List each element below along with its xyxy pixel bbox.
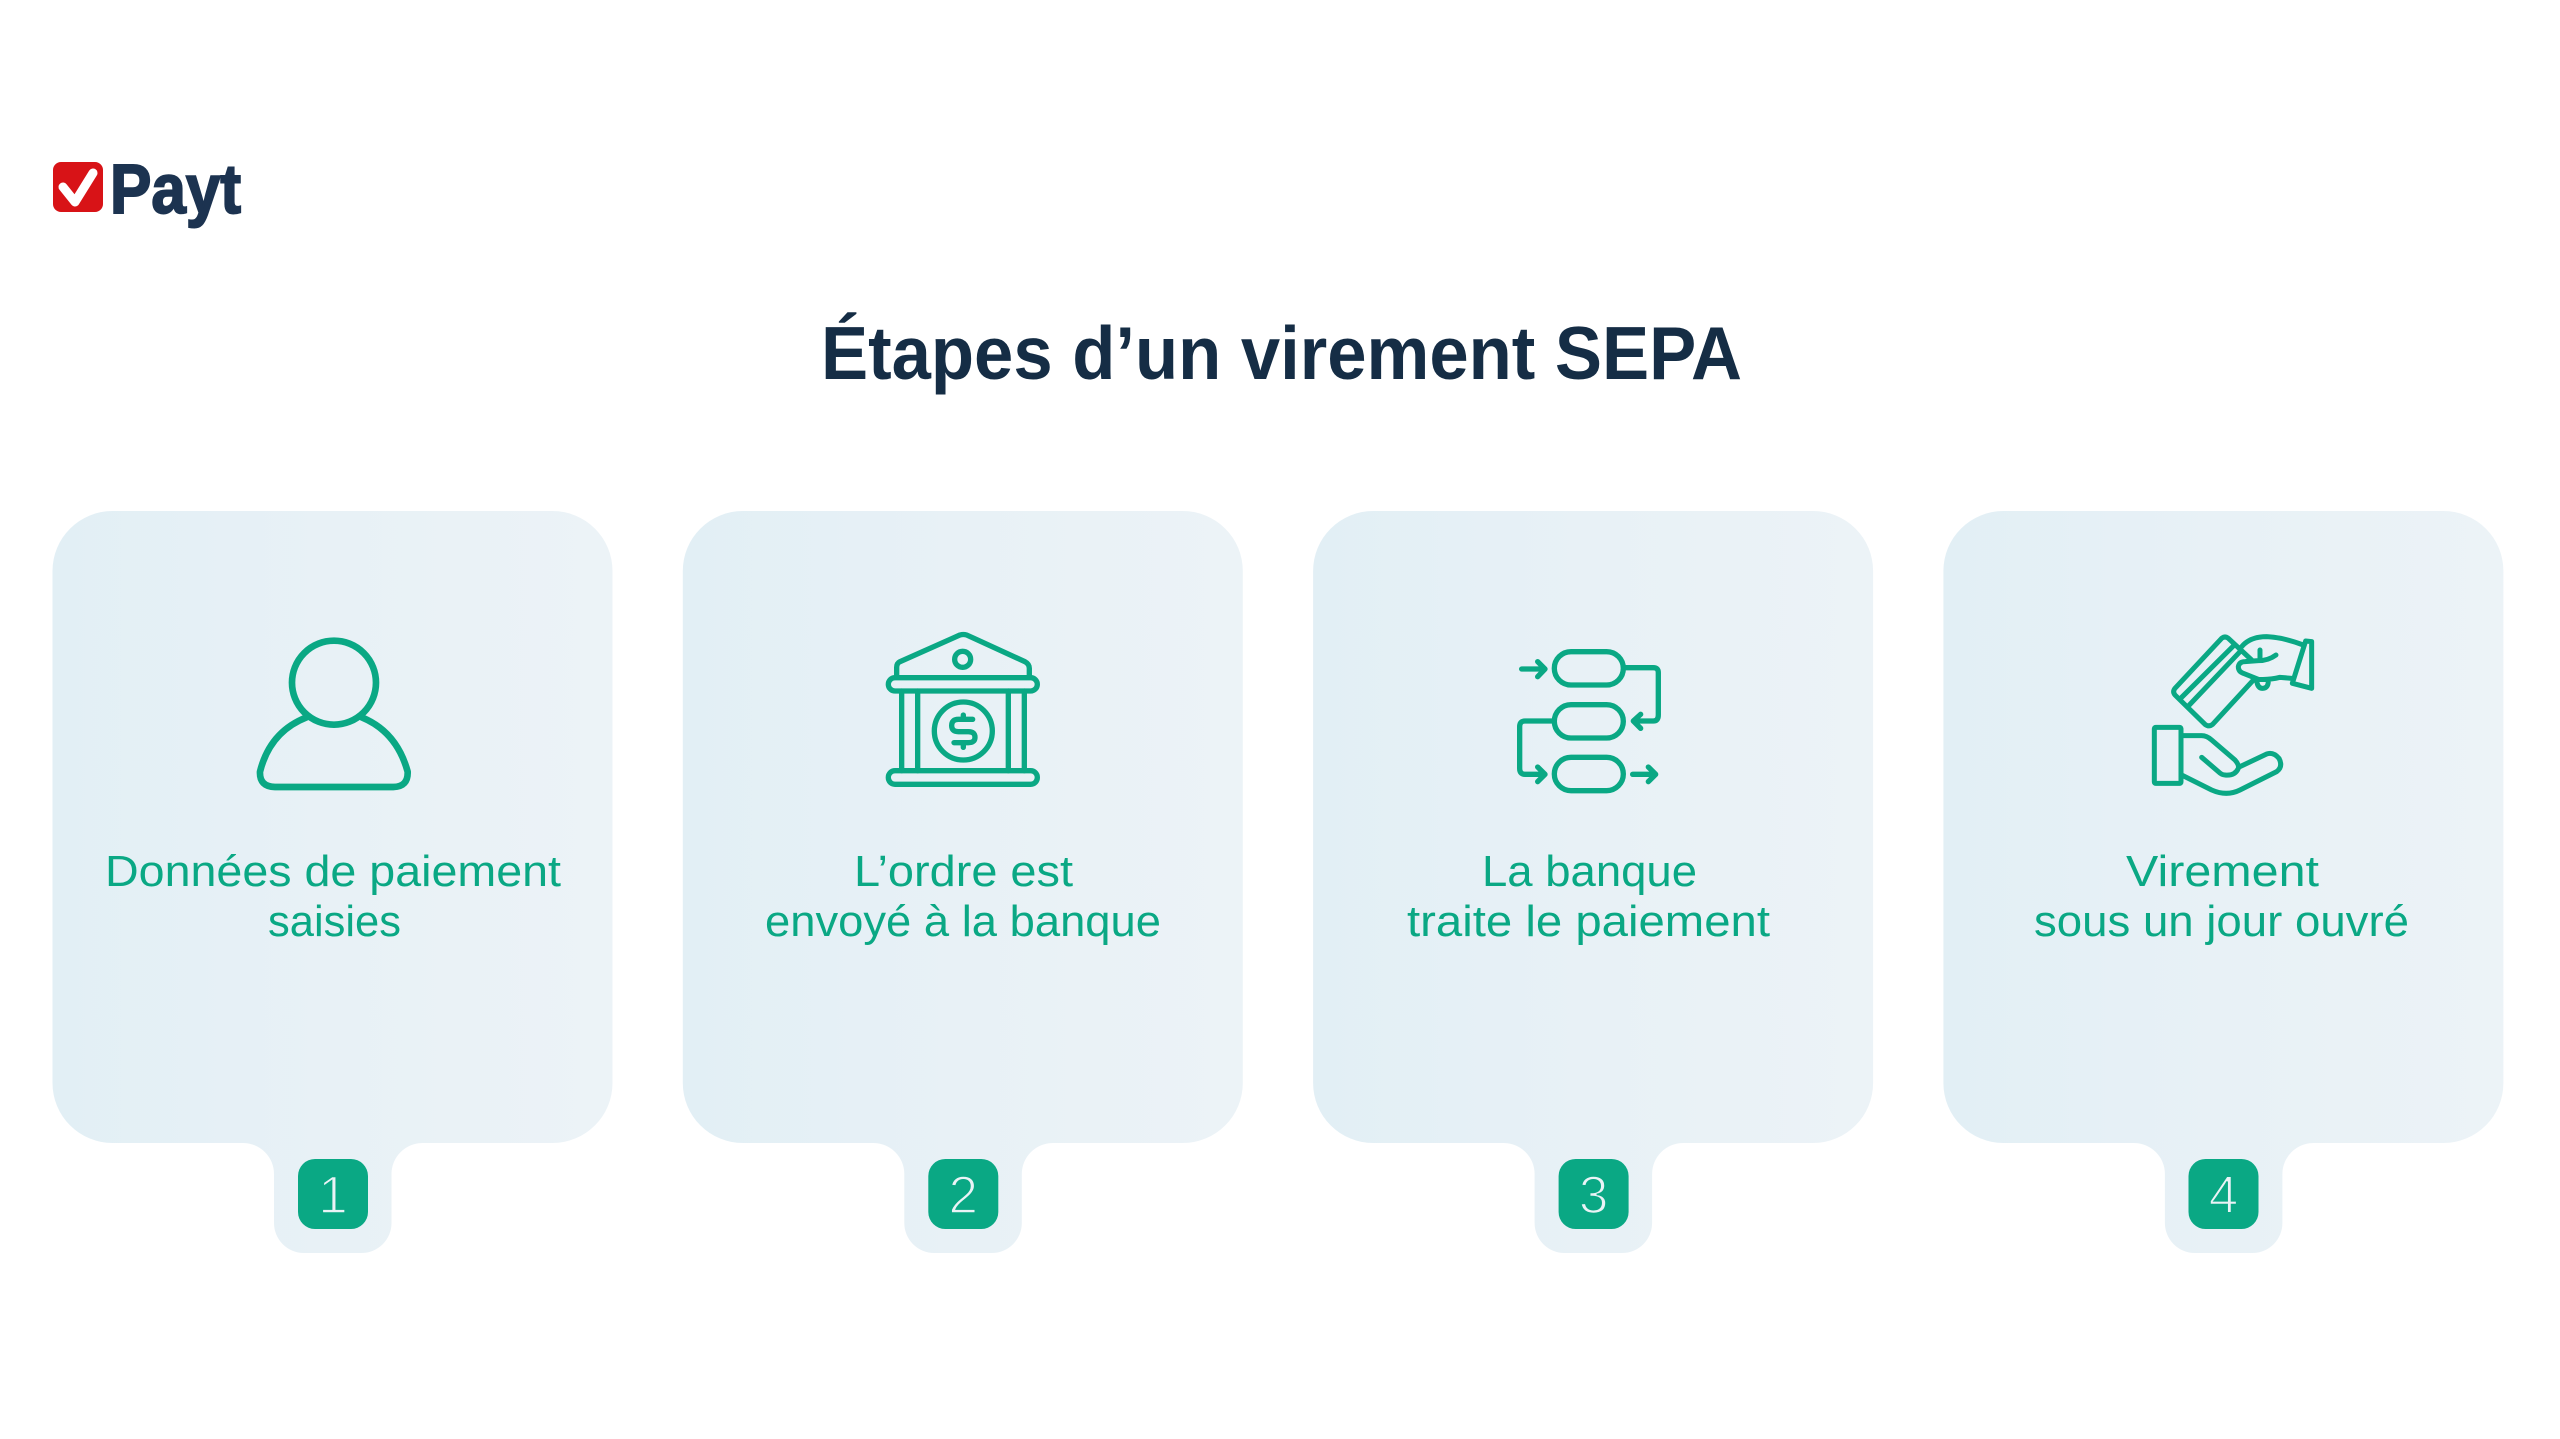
step text: sous un jour ouvré: [2034, 897, 2409, 946]
icon: bank: [888, 634, 1037, 784]
number badge 1: [298, 1159, 368, 1229]
number badge 3: 3: [1579, 1166, 1608, 1225]
icon: hands with card: [2154, 637, 2312, 793]
icon: person: [260, 641, 408, 787]
title: Étapes d’un virement SEPA: [821, 311, 1742, 395]
panel: step 2: [683, 511, 1243, 1253]
step text: L’ordre est: [854, 847, 1073, 896]
number badge 3: [1559, 1159, 1629, 1229]
panel: step 3: [1313, 511, 1873, 1253]
number badge 2: 2: [949, 1166, 978, 1225]
number badge 4: [2188, 1159, 2258, 1229]
step text: saisies: [268, 897, 401, 946]
step text: La banque: [1482, 847, 1697, 896]
logo: Payt: [53, 150, 241, 228]
card background: [52, 511, 612, 1253]
step text: [105, 847, 561, 946]
logo check box: [53, 162, 103, 212]
step text: [1407, 847, 1770, 946]
icon: process flow: [1520, 652, 1658, 791]
logo wordmark: Payt: [110, 150, 241, 228]
card background: [1943, 511, 2503, 1253]
step text: [765, 847, 1161, 946]
number badge 1: 1: [318, 1166, 348, 1225]
step text: [2034, 847, 2409, 946]
card background: [683, 511, 1243, 1253]
step text: Virement: [2126, 847, 2319, 896]
step text: Données de paiement: [105, 847, 561, 896]
panel: step 4: [1943, 511, 2503, 1253]
number badge 4: 4: [2209, 1166, 2238, 1225]
number badge 2: [928, 1159, 998, 1229]
step text: traite le paiement: [1407, 897, 1770, 946]
card background: [1313, 511, 1873, 1253]
panel: step 1: [52, 511, 612, 1253]
step text: envoyé à la banque: [765, 897, 1161, 946]
